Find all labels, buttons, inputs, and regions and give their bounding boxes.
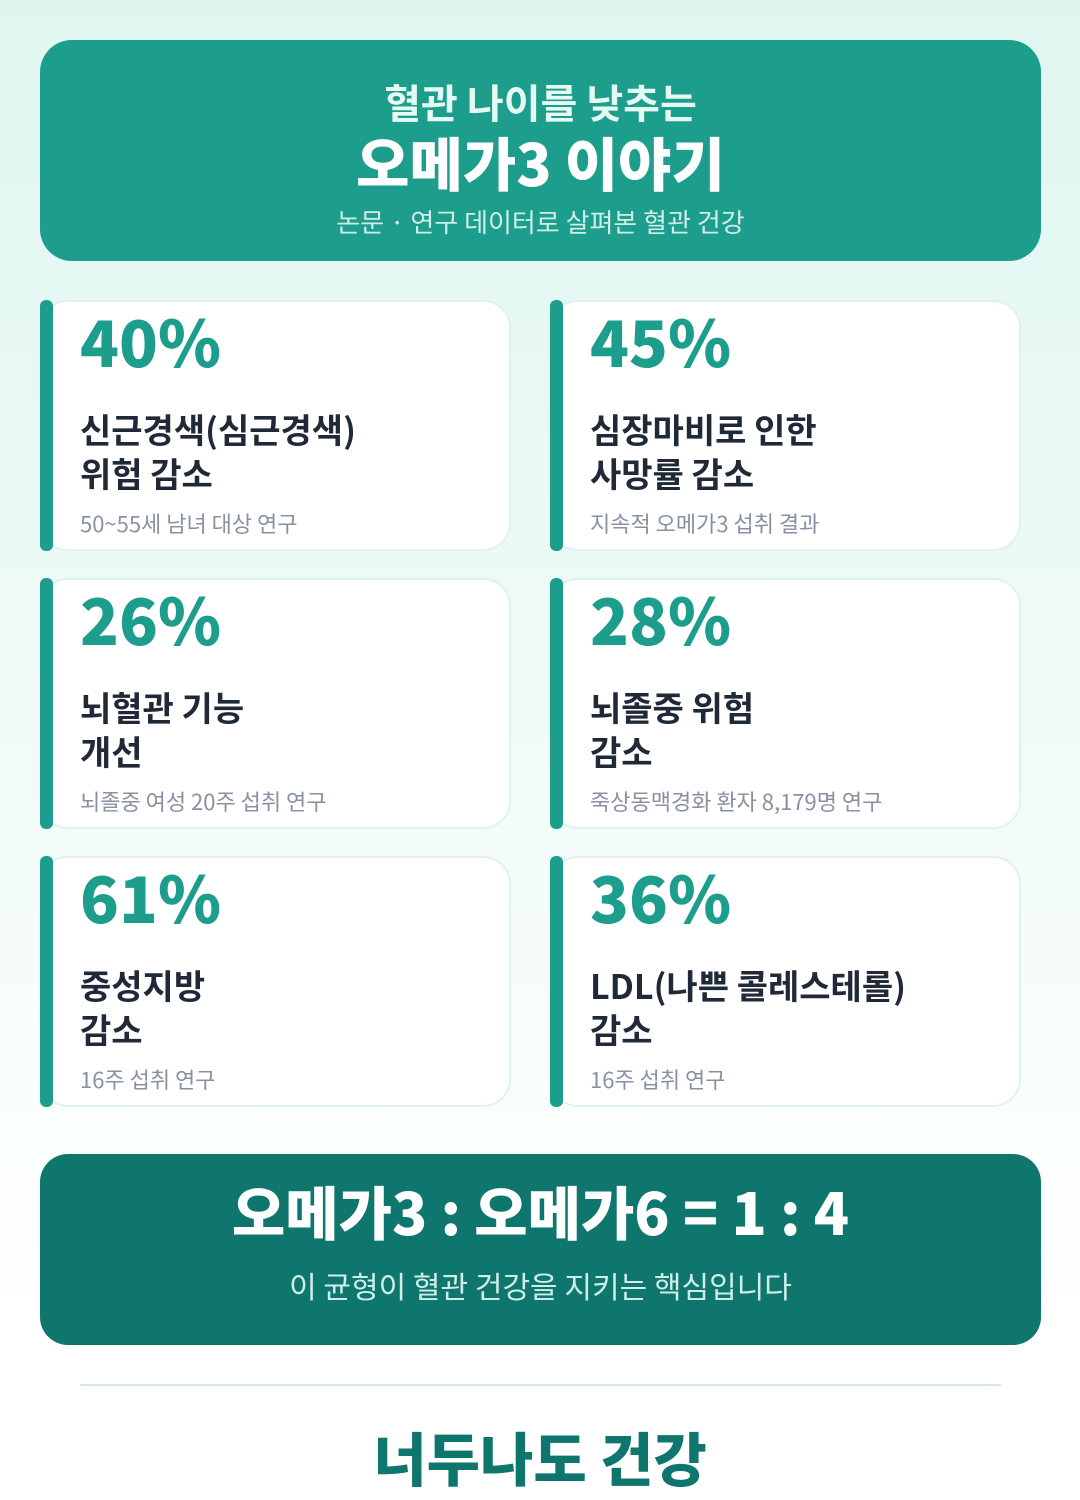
- label: [80, 404, 356, 497]
- label: 개선: [80, 726, 143, 775]
- banner caption: 이 균형이 혈관 건강을 지키는 핵심입니다: [289, 1263, 792, 1307]
- label: 감소: [590, 726, 653, 775]
- note: 지속적 오메가3 섭취 결과: [590, 507, 819, 539]
- label: 뇌졸중 위험: [590, 682, 754, 731]
- header kicker: 혈관 나이를 낮추는: [384, 72, 697, 130]
- card: 26% cerebrovascular: [40, 572, 511, 829]
- brand name: 너두나도 건강: [373, 1414, 707, 1498]
- label: 위험 감소: [80, 448, 213, 497]
- card: 28% stroke: [550, 572, 1021, 829]
- note: 16주 섭취 연구: [80, 1063, 215, 1095]
- label: [590, 960, 906, 1053]
- stat: 36%: [590, 850, 731, 942]
- card: 40% coronary: [40, 294, 511, 551]
- label: 뇌혈관 기능: [80, 682, 244, 731]
- note: 50~55세 남녀 대상 연구: [80, 507, 298, 539]
- note: 뇌졸중 여성 20주 섭취 연구: [80, 785, 327, 817]
- label: 중성지방: [80, 960, 205, 1009]
- header panel: [40, 40, 1041, 261]
- stat: 40%: [80, 294, 221, 386]
- label: 감소: [80, 1004, 143, 1053]
- ratio banner: [40, 1154, 1041, 1345]
- label: [590, 682, 754, 775]
- label: [590, 404, 817, 497]
- label: LDL(나쁜 콜레스테롤): [590, 960, 906, 1009]
- note: 죽상동맥경화 환자 8,179명 연구: [590, 785, 882, 817]
- card: 36% LDL: [550, 850, 1021, 1107]
- label: [80, 960, 205, 1053]
- label: 심장마비로 인한: [590, 404, 817, 453]
- main title: 오메가3 이야기: [356, 119, 725, 203]
- card: 45% cardiac death: [550, 294, 1021, 551]
- label: [80, 682, 244, 775]
- header subtitle: 논문 · 연구 데이터로 살펴본 혈관 건강: [336, 203, 745, 240]
- label: 사망률 감소: [590, 448, 754, 497]
- ratio text: 오메가3 : 오메가6 = 1 : 4: [232, 1168, 849, 1252]
- stat: 61%: [80, 850, 221, 942]
- card: 61% triglycerides: [40, 850, 511, 1107]
- label: 신근경색(심근경색): [80, 404, 356, 453]
- stat: 45%: [590, 294, 731, 386]
- stat: 26%: [80, 572, 221, 664]
- stat: 28%: [590, 572, 731, 664]
- note: 16주 섭취 연구: [590, 1063, 725, 1095]
- label: 감소: [590, 1004, 653, 1053]
